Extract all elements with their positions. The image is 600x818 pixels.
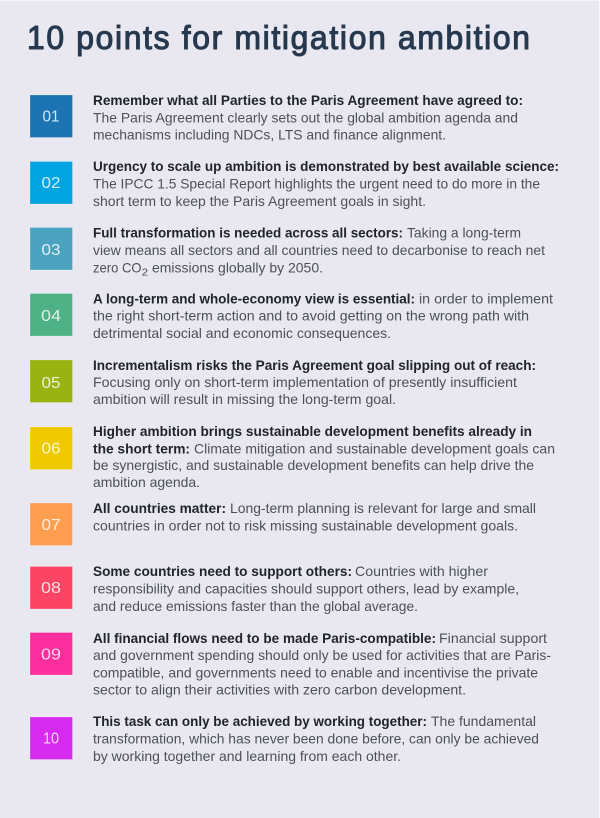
text: point 01: mechanisms including NDCs, LTS and finance alignment. (93, 126, 446, 142)
icon: number 07: 07 (42, 517, 60, 534)
text: point 02: short term to keep the Paris Agreement goals in sight. (93, 193, 426, 209)
point 05 (30, 357, 536, 407)
text: point 01: Remember what all Parties to the Paris Agreement have agreed to: (93, 92, 523, 108)
point 07 (30, 500, 536, 546)
text: point 07: All countries matter: (93, 500, 226, 516)
point 08 (30, 563, 519, 614)
text: point 06: Climate mitigation and sustainable development goals can (194, 440, 555, 456)
text: point 09: All financial flows need to be made Paris-compatible: (93, 630, 436, 646)
icon: number 06 (30, 427, 72, 470)
text: point 04: in order to implement (419, 290, 553, 306)
text: point 07: Long-term planning is relevant for large and small (230, 500, 536, 516)
text: point 04: A long-term and whole-economy view is essential: (93, 290, 415, 306)
text: point 04 (93, 290, 553, 341)
text: point 08: and reduce emissions faster than the global average. (93, 598, 418, 614)
text: point 10: by working together and learning from each other. (93, 748, 401, 764)
icon: number 03: 03 (42, 242, 60, 259)
icon: number 10: 10 (43, 730, 59, 748)
text: point 03: emissions globally by 2050. (152, 260, 323, 276)
icon: number 04: 04 (41, 308, 61, 325)
icon: number 08: 08 (41, 580, 61, 597)
text: point 10: This task can only be achieved by working together: (93, 713, 427, 729)
icon: number 02: 02 (42, 175, 60, 192)
point 01 (30, 92, 523, 142)
icon: number 03 (30, 228, 72, 270)
text: point 07 (93, 500, 536, 534)
text: point 03: view means all sectors and all countries need to decarbonise to reach net (93, 242, 545, 258)
icon: number 05 (30, 360, 72, 402)
icon: number 01 (30, 95, 72, 138)
icon: number 05: 05 (42, 375, 60, 392)
icon: number 08 (30, 566, 72, 609)
text: point 02: Urgency to scale up ambition is demonstrated by best available science: (93, 158, 559, 174)
icon: number 07 (30, 503, 72, 546)
text: point 07: countries in order not to risk missing sustainable development goals. (93, 518, 518, 534)
point 09 (30, 630, 551, 698)
text: point 05: Focusing only on short-term implementation of presently insufficient (93, 374, 517, 390)
text: point 08: Countries with higher (355, 563, 488, 579)
text: point 10: transformation, which has never been done before, can only be achieved (93, 730, 539, 746)
title: 10 points for mitigation ambition (27, 18, 530, 56)
text: point 01 (93, 92, 523, 142)
point 10 (30, 713, 539, 764)
text: point 04: detrimental social and economic consequences. (93, 325, 391, 341)
text: point 06: Higher ambition brings sustainable development benefits already in (93, 423, 532, 439)
text: point 06 (93, 423, 555, 490)
point 06 (30, 423, 555, 490)
text: point 09: and government spending should only be used for activities that are Paris- (93, 647, 551, 663)
text: point 06: be synergistic, and sustainable development benefits can help drive the (93, 457, 534, 473)
text: point 02 (93, 158, 559, 209)
text: point 08 (93, 563, 519, 614)
text: point 03: 2 (142, 268, 149, 278)
text: point 05: Incrementalism risks the Paris Agreement goal slipping out of reach: (93, 357, 536, 373)
text: point 09 (93, 630, 551, 698)
text: point 05 (93, 357, 536, 407)
text: point 06: the short term: (93, 440, 190, 456)
icon: number 09 (30, 632, 72, 675)
text: point 02: The IPCC 1.5 Special Report highlights the urgent need to do more in the (93, 176, 540, 192)
text: point 03: Full transformation is needed across all sectors: (93, 225, 403, 241)
point 04 (30, 290, 553, 341)
point 03 (30, 225, 545, 278)
text: point 01: The Paris Agreement clearly sets out the global ambition agenda and (93, 110, 518, 126)
icon: number 04 (30, 294, 72, 336)
text: point 10: The fundamental (431, 713, 536, 729)
text: point 09: compatible, and governments need to enable and incentivise the private (93, 664, 538, 680)
text: point 09: Financial support (439, 630, 547, 646)
point 02 (30, 158, 559, 209)
icon: number 02 (30, 162, 72, 204)
text: point 08: Some countries need to support others: (93, 563, 352, 579)
icon: number 10 (30, 717, 72, 760)
text: point 04: the right short-term action and to avoid getting on the wrong path with (93, 308, 529, 324)
text: point 08: responsibility and capacities should support others, lead by example, (93, 580, 519, 596)
text: point 05: ambition will result in missing the long-term goal. (93, 391, 396, 407)
text: point 03 (93, 225, 545, 278)
icon: number 06: 06 (42, 440, 60, 458)
text: point 03: Taking a long-term (407, 225, 521, 241)
icon: number 01: 01 (42, 108, 60, 126)
text: point 06: ambition agenda. (93, 474, 200, 490)
icon: number 09: 09 (41, 646, 61, 664)
text: point 09: sector to align their activities with zero carbon development. (93, 682, 466, 698)
text: point 10 (93, 713, 539, 764)
text: point 03: zero CO (93, 260, 142, 276)
